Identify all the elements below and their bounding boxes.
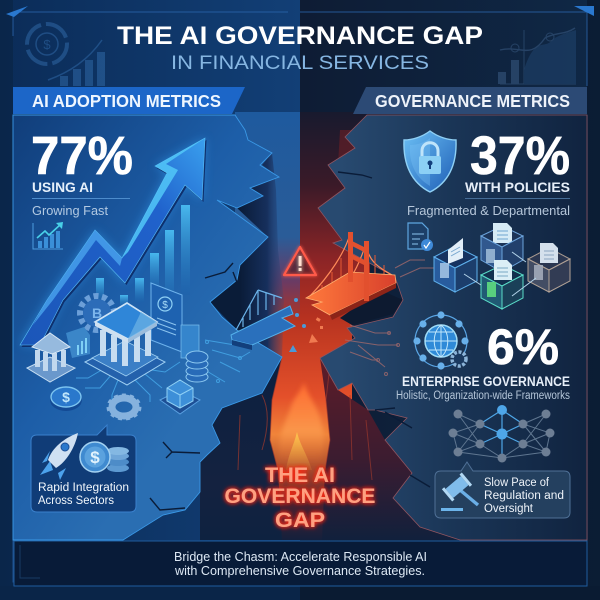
icon: stacked coins xyxy=(186,351,208,382)
bottom banner xyxy=(14,541,587,586)
box: right xyxy=(528,243,570,292)
callout: slow pace xyxy=(435,462,570,518)
stat: 77%: 77% xyxy=(31,126,133,186)
fragmented policy boxes xyxy=(434,223,570,309)
icon: growth chart xyxy=(33,222,63,249)
right land xyxy=(318,115,587,540)
cracks xyxy=(150,172,430,510)
icon: rocket xyxy=(40,433,78,480)
callout text: Oversight xyxy=(484,503,534,515)
callout text: Across Sectors xyxy=(38,495,114,507)
icon: coin stack: $ xyxy=(90,448,100,467)
warning triangle xyxy=(284,247,316,275)
callout text: Rapid Integration xyxy=(38,482,129,494)
circuit traces: left xyxy=(76,340,250,408)
label: enterprise governance: ENTERPRISE GOVERNANCE xyxy=(402,374,570,389)
label: holistic frameworks: Holistic, Organization-wide Frameworks xyxy=(396,390,570,402)
box: left xyxy=(434,238,477,292)
subtitle: IN FINANCIAL SERVICES xyxy=(171,53,429,74)
icon: document and lock xyxy=(151,283,199,358)
callout text: Slow Pace of xyxy=(484,477,550,489)
icon: gear xyxy=(108,395,140,419)
stat: 6%: 6% xyxy=(487,319,559,375)
chasm label: GOVERNANCE xyxy=(224,485,376,508)
banner text: with Comprehensive Governance Strategies. xyxy=(174,564,425,578)
chasm label: THE AI xyxy=(265,464,335,487)
broken blue bridge xyxy=(231,290,295,350)
background chart: top right xyxy=(498,28,576,84)
icon: shield with lock xyxy=(404,131,456,192)
stat: 37%: 37% xyxy=(470,126,570,186)
icon: gear with coin: B xyxy=(92,305,102,321)
broken red bridge xyxy=(306,232,396,320)
icon: globe network xyxy=(413,311,469,370)
right cliff wall xyxy=(318,205,460,540)
box: back xyxy=(481,223,523,272)
ribbon: AI adoption metrics xyxy=(13,87,245,114)
connectors xyxy=(464,252,536,296)
network diagram xyxy=(448,405,554,462)
icon: dollar coin: $ xyxy=(62,389,70,405)
ribbon: governance metrics xyxy=(353,87,587,114)
left lower cliff wall xyxy=(200,357,282,540)
icon: document check xyxy=(408,223,433,251)
icon: main bank xyxy=(85,303,165,385)
title: THE AI GOVERNANCE GAP xyxy=(117,22,483,50)
icon: cube xyxy=(160,380,200,414)
ribbon: AI adoption metrics: AI ADOPTION METRICS xyxy=(32,91,221,111)
banner text: Bridge the Chasm: Accelerate Responsible AI xyxy=(174,550,427,564)
icon: gear with coin xyxy=(80,296,114,330)
rising arrow xyxy=(20,138,206,347)
icon: dollar coin xyxy=(50,387,82,411)
chasm label xyxy=(224,464,376,532)
bar chart behind arrow xyxy=(96,205,190,307)
debris xyxy=(289,298,323,352)
ribbon: governance metrics: GOVERNANCE METRICS xyxy=(375,91,570,111)
callout text: Regulation and xyxy=(484,490,564,502)
label: growing fast: Growing Fast xyxy=(32,203,108,218)
box: front xyxy=(481,260,523,309)
background chart: top left xyxy=(27,24,105,86)
icon: document and lock: $ xyxy=(162,300,168,311)
left upper cliff wall xyxy=(210,153,284,357)
label: fragmented: Fragmented & Departmental xyxy=(407,203,570,218)
circuit traces: right xyxy=(345,260,435,376)
label: using AI: USING AI xyxy=(32,179,93,195)
chasm with fire xyxy=(235,112,370,540)
icon: gavel xyxy=(441,473,478,511)
icon: small chart cube xyxy=(66,327,90,358)
callout: rapid integration xyxy=(31,425,136,512)
flames xyxy=(279,382,324,465)
chasm label: GAP xyxy=(275,509,325,532)
label: with policies: WITH POLICIES xyxy=(465,179,570,195)
left land xyxy=(13,115,282,540)
background chart: top left: $ xyxy=(43,37,51,52)
icon: small bank xyxy=(27,333,75,382)
